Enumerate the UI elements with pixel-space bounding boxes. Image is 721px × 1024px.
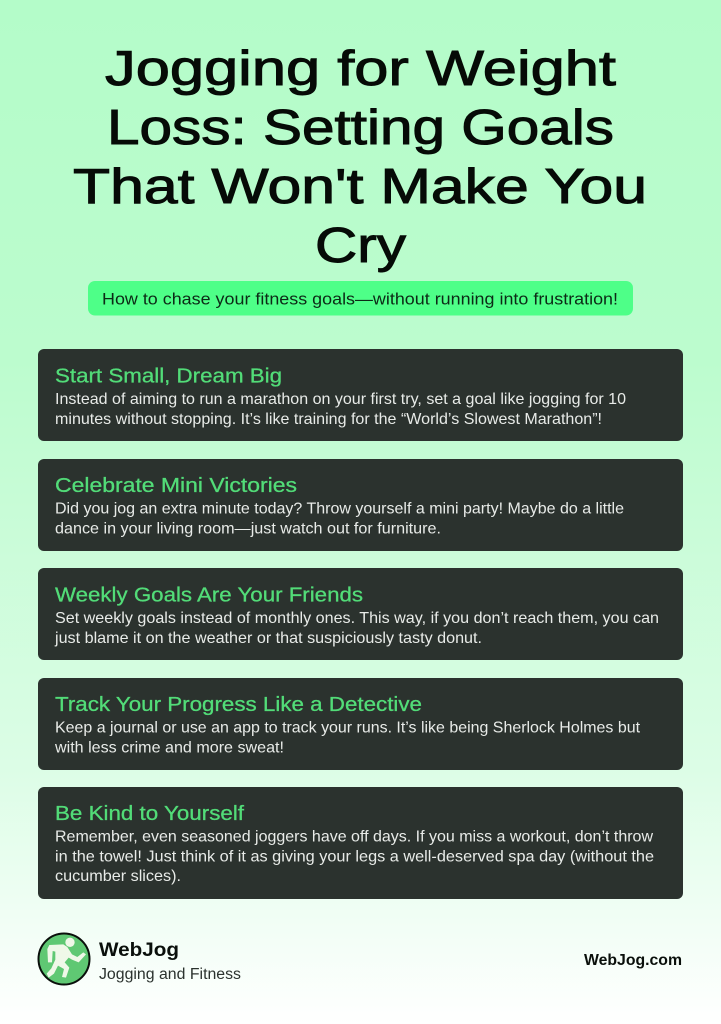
panel: track progress	[38, 678, 683, 770]
subtitle pill: How to chase your fitness goals—without running into frustration!	[102, 290, 618, 308]
panel: track progress: Track Your Progress Like a Detective	[55, 694, 422, 716]
panel: mini victories: Did you jog an extra minute today? Throw yourself a mini party! Maybe do a little	[55, 500, 624, 518]
panel: be kind: Remember, even seasoned joggers have off days. If you miss a workout, don’t throw	[55, 828, 653, 846]
panel: weekly goals: Weekly Goals Are Your Friends	[55, 584, 363, 606]
panel: weekly goals	[38, 568, 683, 660]
panel: weekly goals: Set weekly goals instead of monthly ones. This way, if you don’t reach them, you can	[55, 610, 659, 627]
panel: be kind	[38, 787, 683, 899]
panel: weekly goals: just blame it on the weather or that suspiciously tasty donut.	[54, 630, 482, 647]
panel: track progress: Keep a journal or use an app to track your runs. It’s like being Sherlock Holmes but	[55, 720, 641, 736]
panel: mini victories: dance in your living room—just watch out for furniture.	[55, 520, 441, 538]
panel: be kind: in the towel! Just think of it as giving your legs a well-deserved spa day (without the	[55, 848, 654, 866]
title: Loss: Setting Goals	[107, 100, 614, 155]
panel: be kind: cucumber slices).	[55, 868, 181, 885]
panel: mini victories	[38, 459, 683, 551]
brand tagline: Jogging and Fitness	[99, 966, 241, 983]
panel: start small: Start Small, Dream Big	[55, 366, 282, 388]
title: Cry	[315, 218, 406, 273]
brand name: WebJog	[99, 939, 179, 961]
title: Jogging for Weight	[105, 41, 616, 96]
panel: start small: minutes without stopping. It’s like training for the “World’s Slowest Marathon”!	[55, 411, 602, 428]
title: That Won't Make You	[73, 159, 647, 214]
website: WebJog.com	[584, 952, 682, 969]
panel: track progress: with less crime and more sweat!	[54, 740, 284, 756]
title	[73, 41, 647, 273]
panel: start small	[38, 349, 683, 441]
icon: runner logo	[38, 934, 90, 984]
panel: start small: Instead of aiming to run a marathon on your first try, set a goal like jogging for 10	[55, 391, 626, 408]
subtitle pill	[88, 281, 633, 316]
panel: be kind: Be Kind to Yourself	[55, 803, 244, 825]
panel: mini victories: Celebrate Mini Victories	[55, 475, 297, 497]
